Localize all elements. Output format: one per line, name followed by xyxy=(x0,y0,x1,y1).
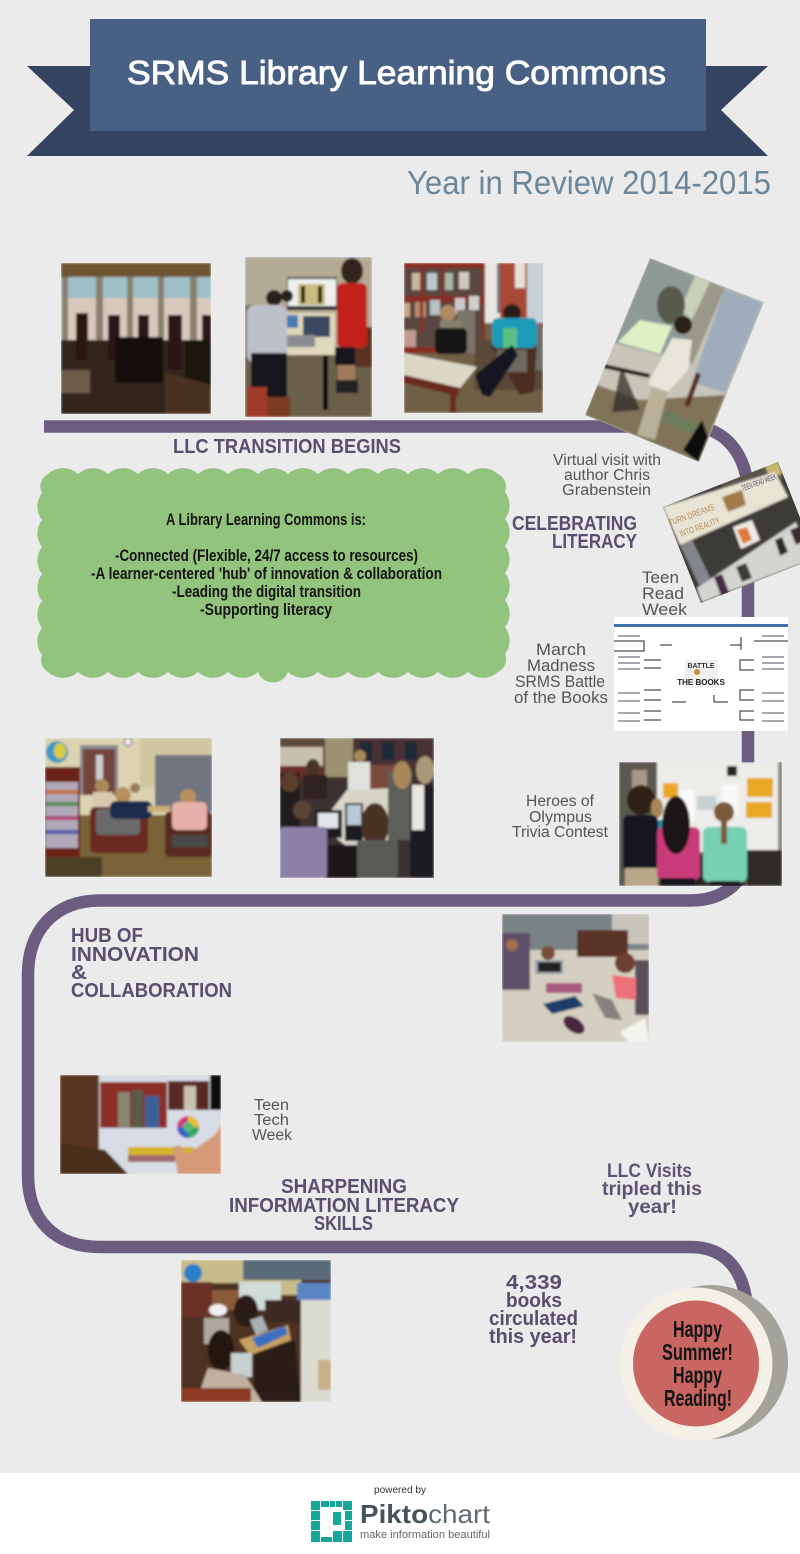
caption: heroes of olympus: Heroes of xyxy=(526,793,595,810)
badge: happy summer: Summer! xyxy=(662,1339,733,1365)
photo: students collaborating at a table xyxy=(502,914,649,1042)
caption: teen read week xyxy=(642,568,688,619)
photo: library seating area xyxy=(45,738,212,877)
heading: hub of innovation and collaboration xyxy=(71,925,232,1002)
stat: LLC visits tripled: tripled this xyxy=(602,1179,702,1200)
caption: teen read week: Teen xyxy=(642,568,679,587)
heading: hub of innovation and collaboration: HUB OF xyxy=(71,925,143,947)
footer: Piktochart xyxy=(0,1473,800,1554)
footer: Piktochart: make information beautiful xyxy=(360,1529,490,1541)
callout: library learning commons definition: -Leading the digital transition xyxy=(172,582,361,601)
timeline path xyxy=(28,426,748,1310)
stat: LLC visits tripled: LLC Visits xyxy=(607,1161,692,1182)
caption: teen read week: Week xyxy=(642,600,688,619)
subtitle: Year in Review 2014-2015 xyxy=(407,164,771,201)
heading: sharpening information literacy skills: INFORMATION LITERACY xyxy=(229,1195,460,1217)
caption: virtual visit: Grabenstein xyxy=(562,482,651,499)
heading: sharpening information literacy skills xyxy=(229,1176,460,1235)
callout: library learning commons definition: -Connected (Flexible, 24/7 access to resources) xyxy=(115,546,418,565)
photo: teen read week display, rotated: TURN DREAMS xyxy=(667,502,716,528)
heading: hub of innovation and collaboration: INNOVATION xyxy=(71,944,199,966)
photo: teen read week display, rotated xyxy=(663,462,800,603)
callout: library learning commons definition: -A learner-centered 'hub' of innovation & collaboration xyxy=(91,564,442,583)
photo: teen read week display, rotated: INTO REALITY xyxy=(678,515,721,539)
title: SRMS Library Learning Commons xyxy=(127,54,666,91)
icon: Piktochart logo xyxy=(311,1501,352,1542)
chart: battle of the books bracket: THE BOOKS xyxy=(677,678,725,687)
title banner xyxy=(27,19,768,156)
badge: happy summer: Reading! xyxy=(664,1385,732,1411)
photo: library interior xyxy=(61,263,211,414)
stat: books circulated: circulated xyxy=(489,1308,578,1330)
stat: books circulated: books xyxy=(506,1290,562,1312)
footer: Piktochart: Piktochart xyxy=(360,1499,491,1529)
chart: battle of the books bracket: BATTLE xyxy=(687,663,715,670)
footer: Piktochart: powered by xyxy=(374,1485,426,1496)
caption: virtual visit: author Chris xyxy=(564,467,650,484)
caption: heroes of olympus: Olympus xyxy=(529,809,592,826)
heading: hub of innovation and collaboration: & xyxy=(71,962,87,984)
stat: books circulated: this year! xyxy=(489,1326,577,1348)
heading: sharpening information literacy skills: SHARPENING xyxy=(281,1176,407,1198)
caption: march madness: of the Books xyxy=(514,688,608,707)
photo: trivia contest xyxy=(619,762,782,886)
photo: students at a screen xyxy=(245,257,372,417)
photo: virtual visit with author, rotated xyxy=(585,258,764,462)
photo: students with laptops xyxy=(181,1260,331,1402)
photo: teachers around a table xyxy=(280,738,434,878)
badge: happy summer: Happy xyxy=(673,1362,722,1388)
heading: celebrating literacy: LITERACY xyxy=(552,531,638,553)
caption: virtual visit xyxy=(553,452,661,499)
caption: teen tech week: Week xyxy=(252,1127,292,1144)
heading: celebrating literacy: CELEBRATING xyxy=(512,513,637,535)
label: LLC transition: LLC TRANSITION BEGINS xyxy=(173,436,401,458)
caption: heroes of olympus: Trivia Contest xyxy=(512,824,609,841)
caption: march madness: Madness xyxy=(527,656,595,675)
badge: happy summer xyxy=(620,1285,788,1440)
photo: teen tech week tablet xyxy=(60,1075,221,1174)
stat: LLC visits tripled: year! xyxy=(628,1197,677,1218)
caption: teen tech week: Tech xyxy=(254,1112,289,1129)
caption: teen read week: Read xyxy=(642,584,684,603)
caption: march madness: SRMS Battle xyxy=(515,672,605,691)
caption: march madness xyxy=(514,640,608,707)
stat: LLC visits tripled xyxy=(602,1161,702,1218)
stat: books circulated: 4,339 xyxy=(506,1272,562,1294)
caption: march madness: March xyxy=(536,640,586,659)
caption: teen tech week xyxy=(252,1097,292,1144)
heading: hub of innovation and collaboration: COLLABORATION xyxy=(71,980,232,1002)
heading: sharpening information literacy skills: SKILLS xyxy=(314,1213,373,1235)
caption: teen tech week: Teen xyxy=(254,1097,289,1114)
callout: library learning commons definition xyxy=(37,468,510,682)
chart: battle of the books bracket xyxy=(614,617,788,731)
badge: happy summer: Happy xyxy=(673,1316,722,1342)
stat: books circulated xyxy=(489,1272,578,1348)
caption: heroes of olympus xyxy=(512,793,609,841)
callout: library learning commons definition: -Supporting literacy xyxy=(200,600,332,619)
callout: library learning commons definition: A Library Learning Commons is: xyxy=(166,510,366,529)
heading: celebrating literacy xyxy=(512,513,638,553)
caption: virtual visit: Virtual visit with xyxy=(553,452,661,469)
photo: students reading xyxy=(404,263,544,413)
